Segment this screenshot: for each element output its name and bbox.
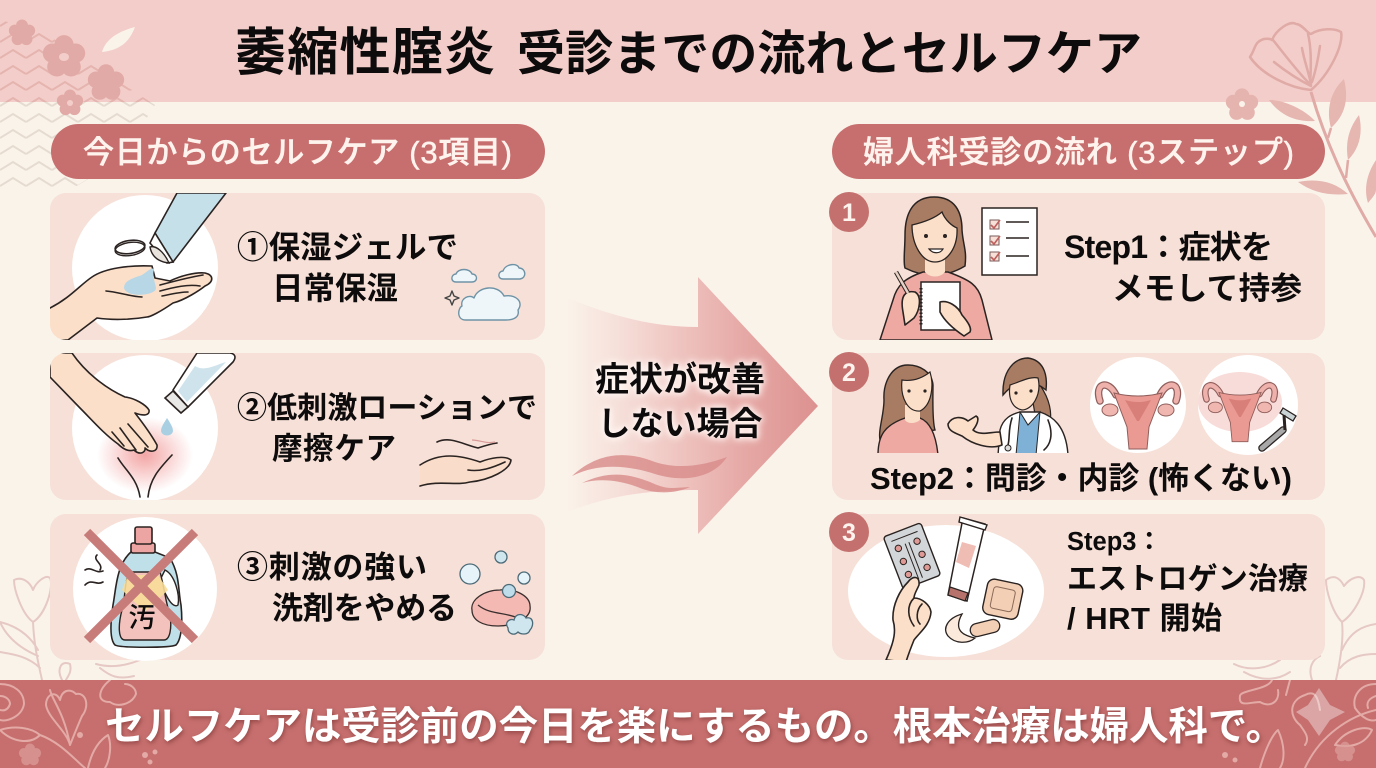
- badge: 1: [829, 192, 869, 232]
- panel: gynecology header pill: 婦人科受診の流れ (3ステップ): [863, 135, 1294, 170]
- panel: self-care header pill: [51, 124, 545, 179]
- panel: self-care 2: [50, 353, 545, 501]
- heading: main title: 受診までの流れとセルフケア: [517, 28, 1142, 81]
- icon: patient and doctor: [878, 358, 1068, 455]
- footer band: [0, 680, 1376, 768]
- panel: step 3: [829, 512, 1325, 662]
- text: item 2: [237, 392, 537, 466]
- panel: step 2: [829, 352, 1325, 500]
- text: footer message: セルフケアは受診前の今日を楽にするもの。根本治療は婦人科で。: [105, 705, 1285, 749]
- badge: 2: [829, 352, 869, 392]
- arrow text: [595, 360, 765, 442]
- icon: uterus diagram: [1090, 357, 1186, 453]
- decoration: top-right flower branch: [1226, 23, 1376, 237]
- text: item 3: 洗剤をやめる: [272, 591, 457, 626]
- heading: main title: 萎縮性腟炎: [235, 24, 495, 81]
- arrow text: 症状が改善: [595, 360, 765, 399]
- wave accents: [572, 455, 727, 492]
- text: step 3: / HRT 開始: [1067, 601, 1222, 636]
- panel: self-care 1: [46, 193, 545, 341]
- decoration: bottom-left line florals: [0, 577, 140, 680]
- icon: open hand with friction lines: [420, 440, 512, 486]
- panel: gynecology header pill: [832, 124, 1325, 179]
- text: step 3: Step3：: [1067, 528, 1162, 556]
- badge: 1: 1: [842, 199, 856, 227]
- decoration: bottom-right line florals: [1234, 577, 1376, 680]
- arrow: symptoms not improving: [567, 277, 818, 534]
- badge: 3: [829, 512, 869, 552]
- text: item 1: 日常保湿: [272, 270, 398, 306]
- text: step 3: エストロゲン治療: [1067, 563, 1308, 596]
- text: item 2: ②低刺激ローションで: [237, 392, 537, 425]
- badge: 3: 3: [842, 519, 856, 547]
- text: item 2: 摩擦ケア: [272, 432, 396, 466]
- icon: crossed-out detergent bottle: [85, 527, 195, 647]
- arrow text: しない場合: [598, 405, 762, 442]
- decoration: footer florals: [0, 680, 1376, 768]
- icon: woman with notebook and checklist: [880, 197, 1037, 340]
- icon: clouds and sparkle: [445, 265, 525, 320]
- panel: self-care 3: [50, 514, 545, 661]
- panel: step 1: [829, 192, 1325, 340]
- text: step 1: [1064, 229, 1302, 306]
- text: item 1: ①保湿ジェルで: [237, 229, 458, 265]
- icon: crossed-out detergent bottle: 汚: [128, 603, 156, 633]
- text: step 2: Step2：問診・内診 (怖くない): [870, 461, 1292, 496]
- text: item 1: [237, 229, 458, 306]
- panel: self-care header pill: 今日からのセルフケア (3項目): [83, 135, 512, 170]
- text: step 1: Step1：症状を: [1064, 229, 1273, 265]
- heading: main title: [235, 24, 1142, 81]
- badge: 2: 2: [842, 359, 856, 387]
- icon: uterus with speculum: [1198, 355, 1298, 455]
- icon: hand applying lotion: [50, 353, 235, 501]
- icon: medicine, cream, patch and ring: [848, 517, 1044, 662]
- title band: [0, 0, 1376, 102]
- icon: soap and bubbles: [460, 551, 533, 634]
- text: step 1: メモして持参: [1112, 270, 1302, 306]
- text: item 3: ③刺激の強い: [237, 550, 427, 585]
- icon: hand with moisturizing gel: [46, 193, 226, 341]
- decoration: top-left chevrons and flowers: [0, 20, 155, 187]
- text: step 3: [1067, 528, 1308, 636]
- text: item 3: [237, 550, 457, 626]
